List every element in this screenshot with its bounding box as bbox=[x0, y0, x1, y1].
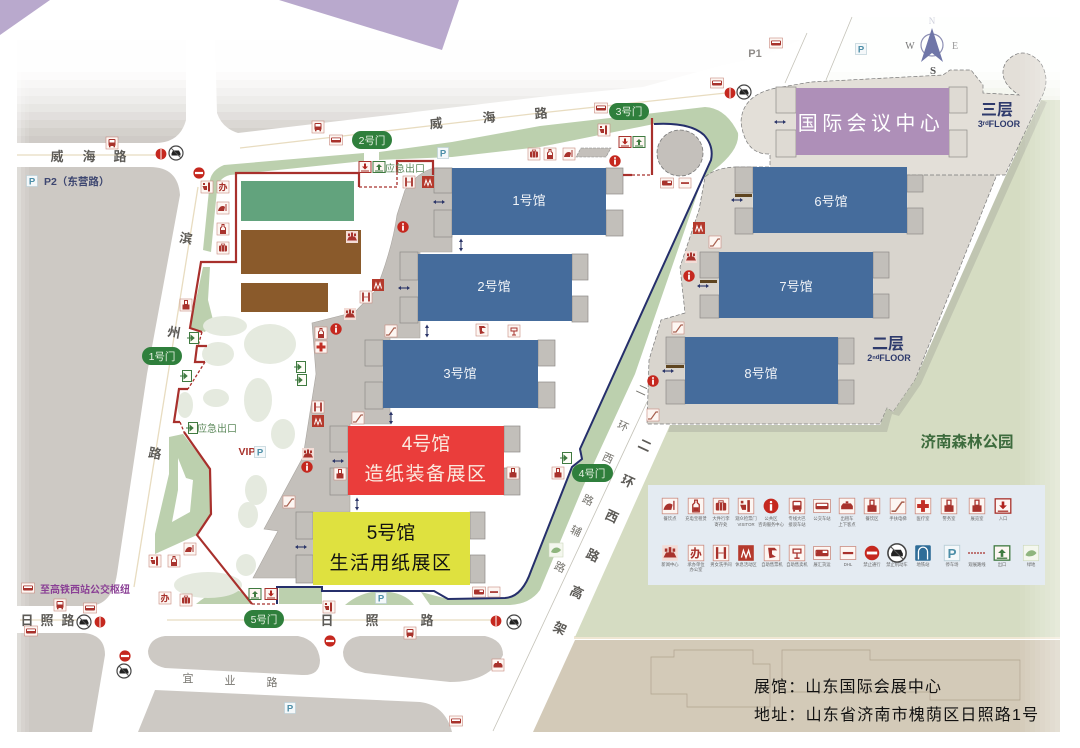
compass: N bbox=[929, 16, 936, 26]
legend row 2: 展汇货运 bbox=[813, 561, 831, 568]
place labels: P2（东营路） bbox=[44, 175, 109, 188]
road names: 日 bbox=[320, 613, 334, 628]
legend row 1: VISITOR bbox=[737, 522, 755, 527]
floor edge shadow bbox=[668, 100, 1047, 432]
decorative purple corners bbox=[0, 0, 459, 50]
legend row 1 bbox=[662, 498, 1011, 528]
road names: 环 bbox=[619, 472, 637, 491]
road names: 照 bbox=[40, 613, 54, 628]
compass bbox=[905, 16, 958, 77]
legend row 1: 接驳车站 bbox=[788, 521, 806, 528]
hall 6: 6号馆 bbox=[814, 194, 848, 209]
road names: 宜 bbox=[182, 671, 194, 685]
hall 5: household paper bbox=[296, 512, 485, 585]
place labels: 应急出口 bbox=[197, 422, 237, 435]
compass: E bbox=[952, 41, 958, 52]
road names: 路 bbox=[113, 149, 127, 164]
map icons bbox=[22, 38, 866, 726]
outdoor exhibition plots bbox=[241, 181, 361, 312]
legend row 2: 男女洗手间 bbox=[710, 561, 732, 568]
road names: 高 bbox=[568, 583, 586, 602]
legend row 2: 出口 bbox=[998, 561, 1006, 568]
floor labels bbox=[867, 102, 1021, 363]
pale tree clusters bbox=[174, 316, 296, 598]
road names: 照 bbox=[365, 613, 379, 628]
round plaza bbox=[657, 130, 703, 176]
road names: 路 bbox=[147, 445, 163, 462]
venue and address bbox=[754, 678, 1039, 724]
forest park: north part bbox=[790, 17, 1060, 150]
legend row 2: 自助售卖机 bbox=[786, 561, 808, 568]
hall 7 bbox=[700, 252, 889, 318]
road names: 二 bbox=[636, 436, 654, 455]
gate pills: 1号门 bbox=[149, 350, 175, 363]
place labels: VIP bbox=[239, 446, 255, 458]
map base: road blocks bbox=[17, 40, 800, 732]
legend panel bbox=[648, 485, 1045, 585]
gate pills: 5号门 bbox=[251, 613, 277, 626]
hall: international conference center bbox=[796, 88, 949, 155]
hall 5: household paper: 生活用纸展区 bbox=[329, 552, 453, 574]
road names: 威 bbox=[50, 149, 64, 164]
road names: 威 bbox=[429, 115, 443, 132]
legend row 2: 观展路线 bbox=[968, 561, 986, 568]
place labels: 应急出口 bbox=[385, 162, 425, 175]
red visitor route bbox=[174, 118, 652, 604]
venue and address: 地址：山东省济南市槐荫区日照路1号 bbox=[754, 706, 1039, 724]
legend row 1: 公共区 bbox=[765, 515, 778, 522]
legend row 2: 办公室 bbox=[690, 566, 703, 573]
road names: 西 bbox=[600, 451, 615, 467]
road names: 环 bbox=[615, 419, 630, 435]
legend row 1: 出租车 bbox=[841, 515, 854, 522]
floor labels: 二层 bbox=[872, 336, 904, 353]
hall 4: papermaking equipment: 造纸装备展区 bbox=[364, 463, 488, 485]
legend row 2: 停车场 bbox=[946, 561, 959, 568]
hall: international conference center: 国际会议中心 bbox=[798, 112, 944, 135]
gate pills: 2号门 bbox=[359, 134, 385, 147]
road names: 海 bbox=[482, 109, 496, 126]
legend row 1: 大件行李 bbox=[712, 515, 730, 522]
legend row 1: 餐饮点 bbox=[664, 515, 677, 522]
hall 3 bbox=[365, 340, 555, 409]
stair bars bbox=[666, 194, 752, 368]
legend row 2: 禁止通行 bbox=[863, 561, 881, 568]
legend row 1: 入口 bbox=[999, 516, 1007, 521]
hall 8: 8号馆 bbox=[744, 366, 778, 381]
legend row 1: 展览室 bbox=[971, 515, 984, 522]
hall 4: papermaking equipment: 4号馆 bbox=[402, 433, 450, 455]
road lines bbox=[17, 17, 852, 731]
floor plan: level 2 halls 1-5 bbox=[253, 168, 452, 578]
hall 8 bbox=[666, 337, 854, 404]
road names: 滨 bbox=[178, 230, 194, 247]
compass: S bbox=[930, 65, 936, 77]
floor plan: level 2 halls 6-8 bbox=[647, 167, 1000, 424]
road names bbox=[20, 105, 654, 689]
hall 6 bbox=[735, 167, 923, 234]
place labels: 至高铁西站公交枢纽 bbox=[40, 583, 130, 596]
legend row 2 bbox=[661, 544, 1039, 573]
forest park: main lawn bbox=[575, 100, 1060, 637]
gate pills: 3号门 bbox=[616, 105, 642, 118]
floor labels: 三层 bbox=[981, 102, 1013, 119]
legend row 1: 充电宝租赁 bbox=[685, 515, 707, 522]
road names: 路 bbox=[420, 613, 434, 628]
legend row 1: 观众检票门 bbox=[735, 515, 757, 522]
compass: W bbox=[905, 41, 915, 52]
road names: 海 bbox=[82, 149, 96, 164]
road names: 路 bbox=[552, 559, 568, 576]
road names: 州 bbox=[166, 324, 182, 341]
gate pills bbox=[142, 103, 649, 628]
legend row 1: 寄存处 bbox=[715, 521, 728, 528]
road names: 路 bbox=[266, 676, 278, 689]
hall 2 bbox=[400, 252, 588, 323]
hall 3: 3号馆 bbox=[443, 366, 477, 381]
legend row 1: 手扶电梯 bbox=[889, 515, 907, 522]
hall 1: 1号馆 bbox=[512, 193, 546, 208]
legend row 2: 绿地 bbox=[1027, 561, 1036, 567]
road names: 业 bbox=[224, 674, 236, 687]
hall 4: papermaking equipment bbox=[330, 426, 520, 495]
legend row 2: 休息活动区 bbox=[735, 561, 757, 568]
legend row 1: 医疗室 bbox=[917, 515, 930, 522]
venue and address: 展馆：山东国际会展中心 bbox=[754, 678, 942, 696]
park name: 济南森林公园 bbox=[920, 432, 1014, 451]
white inner shape in green belt bbox=[172, 458, 193, 522]
road names: 西 bbox=[603, 507, 621, 526]
place labels: P1 bbox=[748, 48, 762, 60]
floor labels: 3ʳᵈFLOOR bbox=[978, 119, 1021, 129]
legend row 1: 公交车站 bbox=[813, 515, 831, 522]
legend row 1: 上下客点 bbox=[838, 521, 856, 528]
road names: 二 bbox=[634, 383, 649, 399]
road names: 路 bbox=[534, 105, 548, 122]
hall 1 bbox=[434, 168, 623, 237]
legend row 2: 地铁站 bbox=[917, 561, 930, 568]
legend row 1: 警务室 bbox=[943, 515, 956, 522]
legend row 2: 自助售票机 bbox=[761, 561, 783, 568]
hall 2: 2号馆 bbox=[477, 279, 511, 294]
hatched area bbox=[576, 148, 611, 157]
gate pills: 4号门 bbox=[579, 467, 605, 480]
legend row 2: 新闻中心 bbox=[661, 561, 679, 568]
road names: 辅 bbox=[568, 522, 584, 540]
legend row 1: 餐饮区 bbox=[866, 515, 879, 522]
road names: 日 bbox=[20, 613, 34, 628]
hall 5: household paper: 5号馆 bbox=[367, 522, 415, 544]
legend row 1: 咨询服务中心 bbox=[758, 521, 785, 528]
legend row 1: 专线大巴 bbox=[788, 515, 806, 522]
floor plan: conference level bbox=[741, 53, 1046, 175]
lower district bbox=[533, 636, 1060, 732]
road names: 架 bbox=[551, 619, 569, 638]
road names: 路 bbox=[580, 492, 596, 509]
road names: 路 bbox=[584, 546, 602, 565]
legend row 2: DHL bbox=[844, 562, 853, 567]
place labels bbox=[40, 48, 762, 596]
conference side rooms bbox=[776, 87, 967, 157]
legend row 2: 禁止机动车 bbox=[886, 561, 908, 568]
hall 7: 7号馆 bbox=[779, 279, 813, 294]
navy delivery route bbox=[277, 124, 712, 604]
floor labels: 2ⁿᵈFLOOR bbox=[867, 353, 911, 363]
roadside green belts bbox=[155, 107, 738, 605]
legend row 2: 承办单位 bbox=[687, 561, 705, 568]
road names: 路 bbox=[61, 613, 75, 628]
